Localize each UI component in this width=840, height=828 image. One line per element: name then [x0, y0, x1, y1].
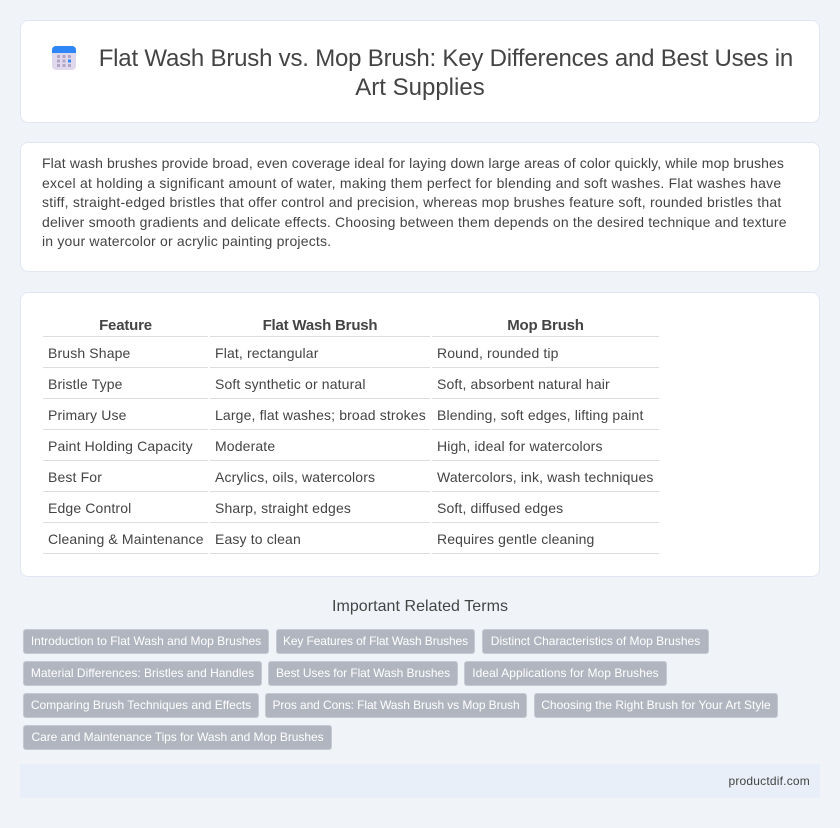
tag group: related terms: Introduction to Flat Wash and Mop Brushes	[31, 634, 261, 648]
row: primary use: Large, flat washes; broad strokes	[215, 407, 426, 423]
row: best for: Best For	[48, 469, 102, 485]
tag group: related terms: Best Uses for Flat Wash Brushes	[276, 666, 450, 680]
title: Art Supplies	[355, 74, 485, 101]
row: best for: Acrylics, oils, watercolors	[215, 469, 375, 485]
tag group: related terms: Material Differences: Bristles and Handles	[31, 666, 254, 680]
table header: Feature	[99, 317, 152, 334]
tag group: related terms: Choosing the Right Brush for Your Art Style	[541, 698, 771, 712]
row: bristle type: Soft, absorbent natural hair	[437, 376, 610, 392]
text block: description: excel at holding a significant amount of water, making them perfect for blending and soft washes. Flat washes have	[42, 175, 781, 191]
row: bristle type: Soft synthetic or natural	[215, 376, 366, 392]
row: brush shape: Flat, rectangular	[215, 345, 319, 361]
row: cleaning and maintenance	[48, 531, 594, 547]
row: edge control: Edge Control	[48, 500, 131, 516]
row: best for: Watercolors, ink, wash techniques	[437, 469, 654, 485]
text block: description: Flat wash brushes provide broad, even coverage ideal for laying down large areas of color quickly, while mop brushes	[42, 155, 784, 171]
panel: title card	[20, 20, 820, 123]
tag group: related terms: Comparing Brush Techniques and Effects	[31, 698, 251, 712]
tag group: related terms	[23, 629, 778, 750]
row: paint holding capacity	[48, 438, 603, 454]
row: brush shape	[48, 345, 559, 361]
row: bristle type	[48, 376, 610, 392]
row: best for	[48, 469, 654, 485]
row: edge control	[48, 500, 563, 516]
row: brush shape: Round, rounded tip	[437, 345, 559, 361]
tag group: related terms: Care and Maintenance Tips for Wash and Mop Brushes	[31, 730, 324, 744]
table header: Mop Brush	[507, 317, 584, 334]
row: brush shape: Brush Shape	[48, 345, 130, 361]
tag group: related terms: Ideal Applications for Mop Brushes	[472, 666, 659, 680]
text block: description: deliver smooth gradients and delicate effects. Choosing between them depends on the desired technique and texture	[42, 214, 787, 230]
row: cleaning and maintenance: Requires gentle cleaning	[437, 531, 594, 547]
row: paint holding capacity: High, ideal for watercolors	[437, 438, 603, 454]
row: primary use	[48, 407, 644, 423]
text block: description: in your watercolor or acrylic painting projects.	[42, 233, 331, 249]
heading: important related terms: Important Related Terms	[332, 598, 508, 615]
row: bristle type: Bristle Type	[48, 376, 123, 392]
tag group: related terms: Distinct Characteristics of Mop Brushes	[491, 634, 700, 648]
footer bar	[20, 764, 820, 798]
icon: calendar	[52, 46, 76, 70]
panel: comparison table card	[20, 292, 820, 577]
title: Flat Wash Brush vs. Mop Brush: Key Differences and Best Uses in	[99, 45, 793, 72]
row: edge control: Soft, diffused edges	[437, 500, 563, 516]
tag group: related terms: Pros and Cons: Flat Wash Brush vs Mop Brush	[272, 698, 520, 712]
row: cleaning and maintenance: Easy to clean	[215, 531, 301, 547]
row: cleaning and maintenance: Cleaning & Maintenance	[48, 531, 204, 547]
table header: Flat Wash Brush	[263, 317, 377, 334]
title	[99, 45, 793, 101]
row: paint holding capacity: Paint Holding Capacity	[48, 438, 193, 454]
panel: description card	[20, 142, 820, 272]
table header	[99, 317, 584, 334]
row: primary use: Primary Use	[48, 407, 127, 423]
tag group: related terms: Key Features of Flat Wash Brushes	[283, 634, 468, 648]
row: edge control: Sharp, straight edges	[215, 500, 351, 516]
comparison table	[43, 317, 659, 554]
footer source text: productdif.com	[728, 774, 810, 788]
text block: description: stiff, straight-edged bristles that offer control and precision, whereas mop brushes feature soft, rounded bristles that	[42, 194, 782, 210]
row: paint holding capacity: Moderate	[215, 438, 275, 454]
text block: description	[42, 155, 787, 249]
row: primary use: Blending, soft edges, lifting paint	[437, 407, 643, 423]
